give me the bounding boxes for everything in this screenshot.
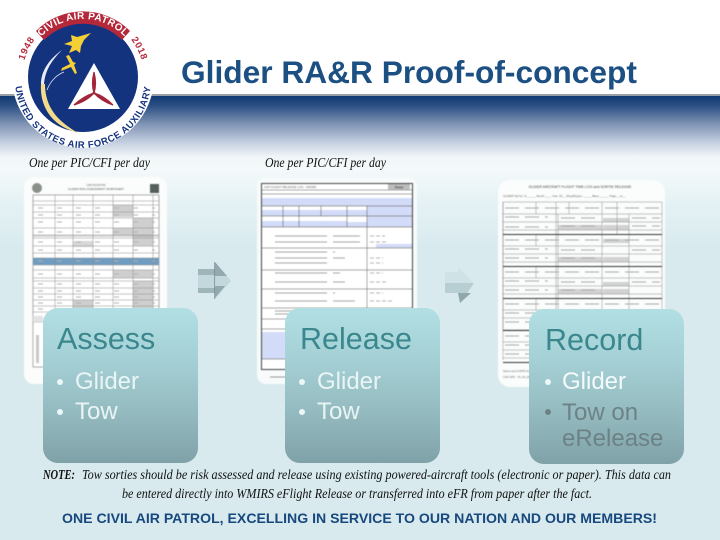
- panel: Assess: [43, 308, 198, 463]
- logo: Civil Air Patrol emblem: UNITED STATES AIR FORCE AUXILIARY: [16, 86, 150, 148]
- document: risk assessment worksheet: GLIDER RISK ASSESSMENT WORKSHEET: [68, 187, 124, 191]
- lavender fields: [262, 198, 412, 206]
- document: aircraft flight time log: Name and CAPID Sortie Release: [503, 369, 545, 373]
- heading: Release: Release: [300, 322, 412, 356]
- footer slogan: ONE CIVIL AIR PATROL, EXCELLING IN SERVICE TO OUR NATION AND OUR MEMBERS!: [62, 510, 657, 526]
- note: be entered directly into WMIRS eFlight Release or transferred into eFR from paper after the fact.: [122, 487, 592, 502]
- document: risk assessment worksheet: [24, 178, 168, 384]
- logo: Civil Air Patrol emblem: CIVIL AIR PATROL: [38, 12, 126, 36]
- light plane: [61, 55, 77, 74]
- note: [42, 468, 671, 502]
- jet: [64, 33, 91, 53]
- heading: Assess: Assess: [57, 322, 155, 356]
- highlighted row: [33, 258, 159, 265]
- arrow 2: [445, 268, 474, 303]
- panel: Record: [529, 309, 684, 464]
- captions: One per PIC/CFI per day: [29, 156, 151, 171]
- document: aircraft flight time log: GLIDER AIRCRAFT FLIGHT TIME LOG and SORTIE RELEASE: [529, 185, 632, 189]
- note and footer text: [42, 468, 671, 526]
- list: Assess items: [57, 368, 139, 425]
- document: flight release log: CAP FLIGHT RELEASE LOG - 042309: [264, 185, 316, 189]
- list: Record items: Glider: [562, 368, 626, 395]
- logo: Civil Air Patrol emblem: [14, 11, 152, 148]
- logo: Civil Air Patrol emblem: 1948: [18, 37, 34, 60]
- document: flight release log: Reset: [395, 185, 403, 189]
- document: flight release log: [256, 179, 418, 384]
- document: aircraft flight time log: GLIDER Tail No: N______ Month:____ Year: 20__ Wing/Region: _____ Base:______ Page:__of__: [503, 194, 626, 198]
- panel: Release: [285, 308, 440, 463]
- logo: Civil Air Patrol emblem: 2018: [131, 36, 148, 60]
- list: Record items: eRelease: [562, 425, 663, 452]
- triangle with propeller: [68, 63, 120, 109]
- captions: [29, 156, 387, 171]
- document: risk assessment worksheet: CAP HOUSTON: [87, 183, 106, 187]
- swoosh: [41, 50, 62, 84]
- list: Release items: Tow: [317, 398, 360, 425]
- list: Assess items: Tow: [75, 398, 118, 425]
- list: Release items: [299, 368, 381, 425]
- list: Record items: [545, 368, 663, 452]
- title: Glider RA&R Proof-of-concept: [181, 54, 637, 90]
- arrow 1: [198, 262, 231, 299]
- list: Release items: Glider: [317, 368, 381, 395]
- list: Assess items: Glider: [75, 368, 139, 395]
- note: NOTE:: [42, 468, 75, 483]
- document: aircraft flight time log: CAP APS - 76_04_06: [503, 375, 530, 379]
- list: Record items: Tow on: [562, 399, 638, 426]
- captions: One per PIC/CFI per day: [265, 156, 387, 171]
- grey cells: [113, 205, 133, 217]
- red banner: [36, 11, 130, 40]
- heading: Record: Record: [545, 323, 643, 357]
- document: aircraft flight time log: [498, 180, 666, 388]
